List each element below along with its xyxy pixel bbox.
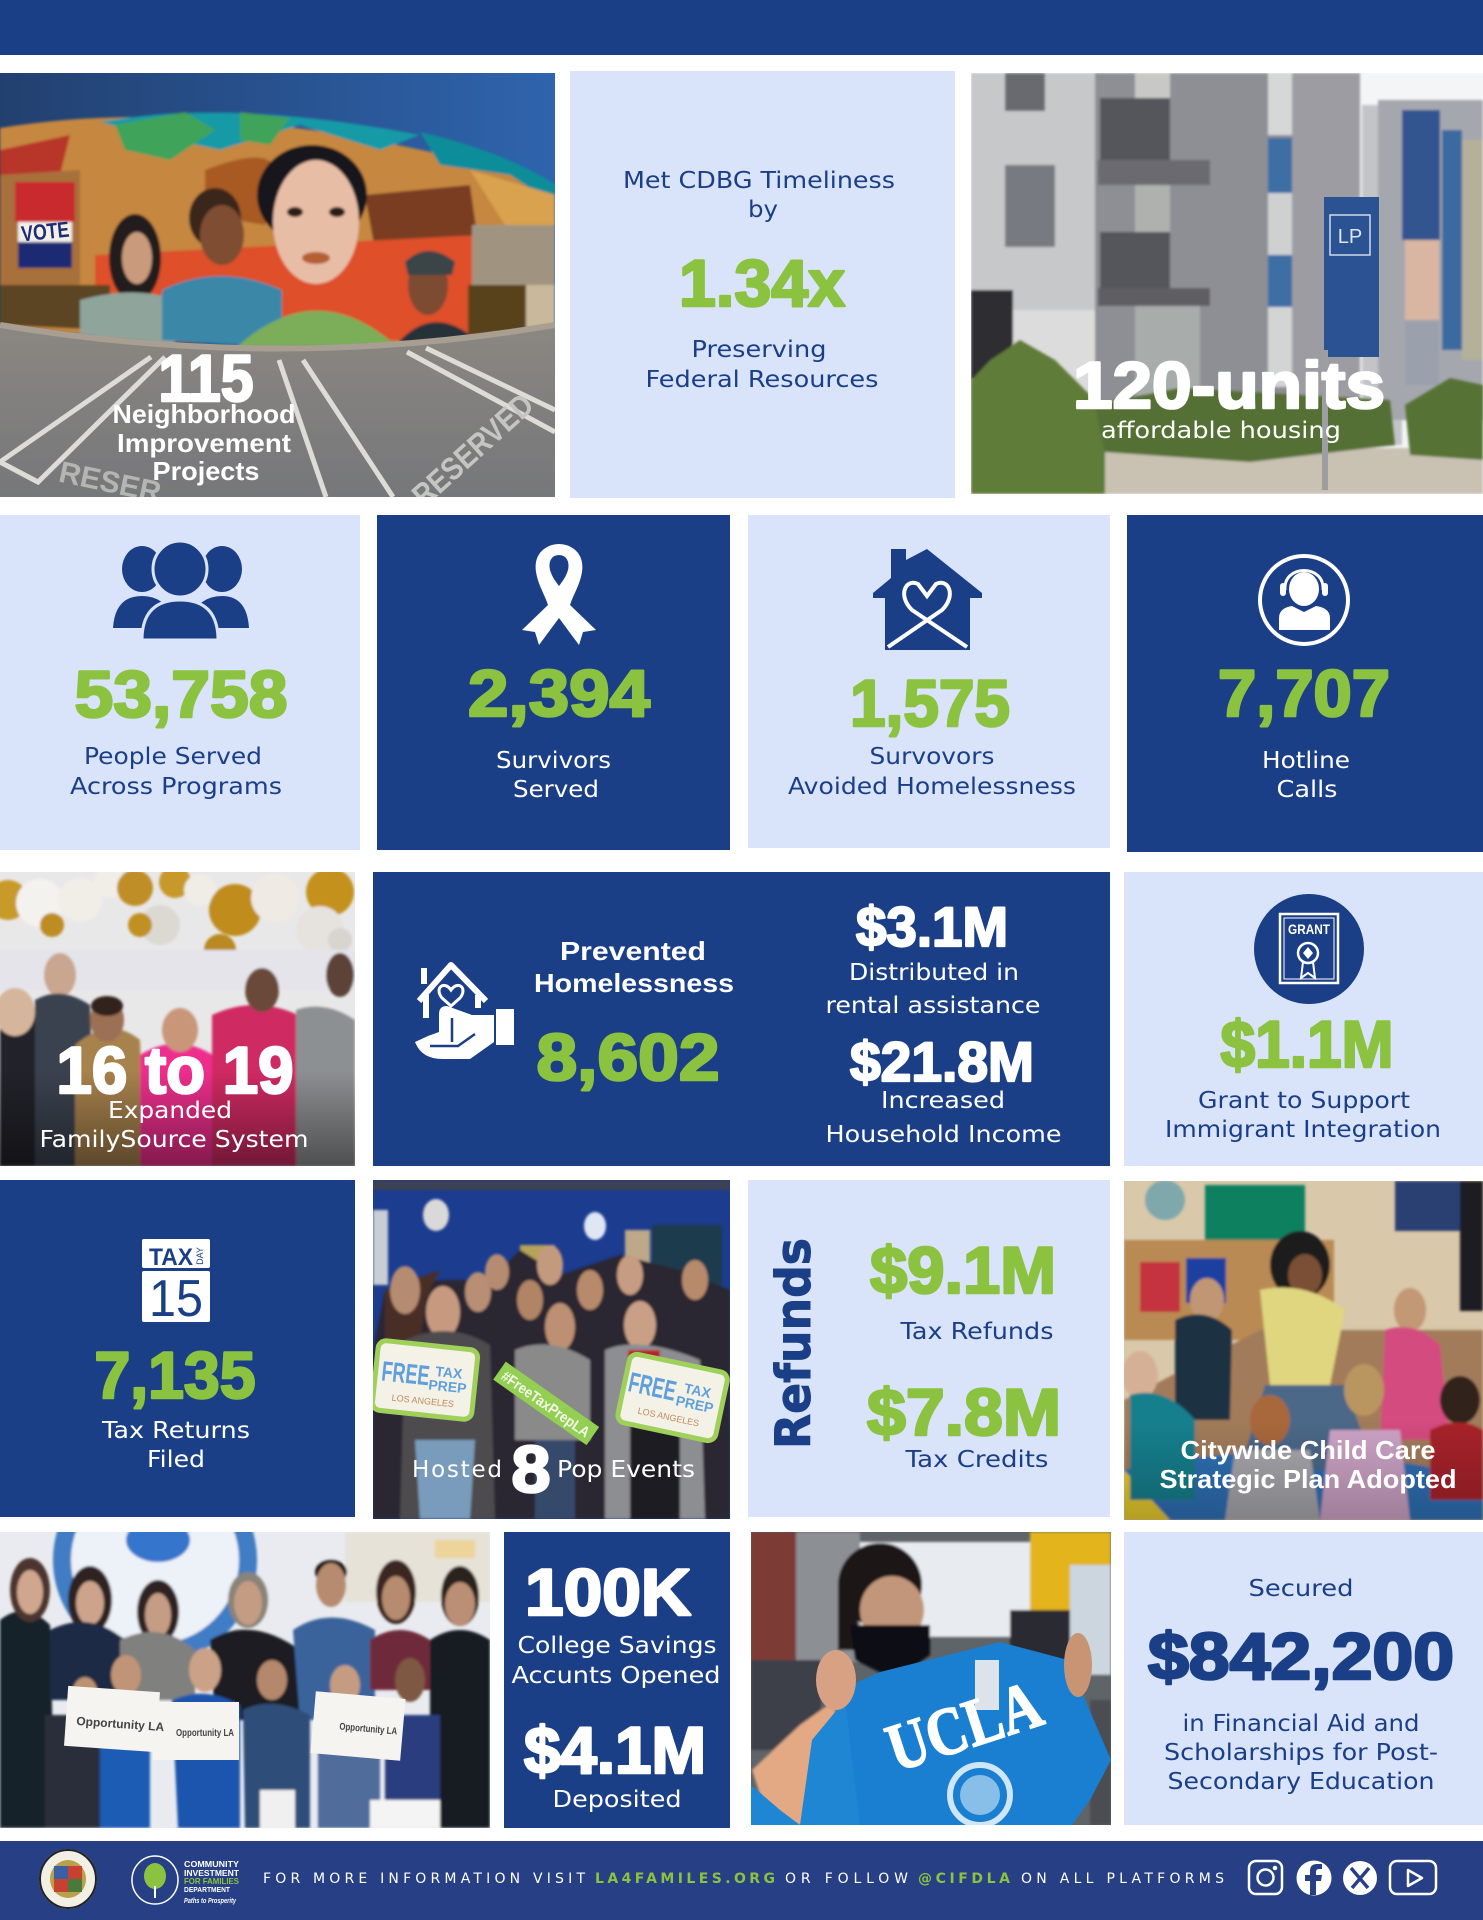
text: secured: Secured: [1248, 1576, 1354, 1602]
icon: grant certificate: GRANT: [1288, 921, 1330, 937]
caption: hosted 8 pop events: Pop Events: [557, 1457, 695, 1483]
panel: free tax prep pop events photo: LOS ANGELES: [391, 1393, 454, 1409]
panel: prevented homelessness: [373, 872, 1110, 1166]
panel: free tax prep pop events photo: PREP: [428, 1376, 467, 1396]
stat: 53,758: 53,758: [74, 657, 288, 731]
icon: X: [1343, 1861, 1377, 1895]
icon: instagram: [1249, 1861, 1282, 1894]
panel: neighborhood improvement mural photo: RESER: [56, 456, 164, 510]
text: tax returns filed: [101, 1418, 250, 1473]
caption: neighborhood improvement projects: Neighborhood: [112, 399, 296, 429]
text: CIFD name: DEPARTMENT: [184, 1887, 231, 1894]
text: footer call to action: OR FOLLOW: [785, 1871, 908, 1887]
panel: affordable housing building photo: LP: [1338, 226, 1362, 248]
header bar: [0, 0, 1483, 55]
text: survivors served: Survivors: [496, 748, 611, 774]
panel: free tax prep pop events photo: FREE: [626, 1366, 679, 1407]
stat: $9.1M tax refunds: [870, 1233, 1056, 1345]
panel: free tax prep pop events photo: LOS ANGELES: [637, 1406, 700, 1428]
stat: 1,575: 1,575: [850, 666, 1010, 740]
text: footer call to action: [263, 1871, 1224, 1887]
text: preserving federal resources: [646, 337, 878, 393]
caption: hosted 8 pop events: 8: [512, 1432, 550, 1506]
text: CIFD name: INVESTMENT: [184, 1868, 240, 1878]
text: financial aid description: Secondary Education: [1168, 1769, 1434, 1795]
text: prevented homelessness: Prevented: [560, 936, 706, 966]
text: survivors served: Served: [513, 777, 599, 803]
text: hotline calls: [1262, 748, 1350, 803]
panel: neighborhood improvement mural photo: [0, 73, 555, 513]
stat: $9.1M tax refunds: Tax Refunds: [899, 1319, 1054, 1345]
panel: tax returns filed: [0, 1180, 355, 1517]
stat: $21.8M household income: Household Income: [826, 1122, 1062, 1148]
footer bar: [0, 1841, 1483, 1920]
stat: 100K: 100K: [525, 1555, 691, 1629]
stat: 8,602: 8,602: [536, 1020, 720, 1094]
text: financial aid description: Scholarships for Post-: [1164, 1740, 1438, 1766]
text: people served across programs: People Served: [84, 744, 262, 770]
panel: free tax prep pop events photo: TAX: [683, 1380, 713, 1401]
icon: ribbon: [522, 544, 596, 645]
photo: group with Opportunity LA signs: [0, 1532, 490, 1828]
stat: $3.1M rental assistance: rental assistance: [826, 993, 1040, 1019]
stat: 120-units: 120-units: [1073, 348, 1385, 422]
text: footer call to action: ON ALL PLATFORMS: [1021, 1871, 1224, 1887]
photo: group with Opportunity LA signs: Opportunity LA: [339, 1722, 398, 1738]
panel: child care photo: [1122, 1180, 1483, 1520]
text: prevented homelessness: Homelessness: [534, 968, 734, 998]
stat: $21.8M household income: $21.8M: [850, 1030, 1034, 1093]
stat: $4.1M deposited: $4.1M: [524, 1713, 706, 1787]
caption: neighborhood improvement projects: [112, 399, 296, 486]
text: survovors avoided homelessness: Avoided Homelessness: [788, 774, 1076, 800]
text: hotline calls: Hotline: [1262, 748, 1350, 774]
stat: 16 to 19: 16 to 19: [56, 1033, 294, 1107]
stat: $3.1M rental assistance: [826, 895, 1040, 1019]
text: people served across programs: [70, 744, 282, 800]
panel: free tax prep pop events photo: TAX: [435, 1363, 464, 1382]
photo: student holding UCLA shirt: [751, 1532, 1111, 1825]
caption: citywide child care strategic plan adopted: Strategic Plan Adopted: [1160, 1464, 1456, 1494]
stat: $4.1M deposited: Deposited: [552, 1787, 682, 1813]
text: college savings accunts opened: Accunts Opened: [512, 1663, 720, 1689]
panel: survivors served: [377, 515, 730, 850]
text: survovors avoided homelessness: Survovors: [870, 744, 994, 770]
icon: youtube: [1390, 1861, 1436, 1894]
icon: tax day calendar: TAX: [149, 1244, 193, 1271]
icon: tax day calendar: DAY: [195, 1247, 205, 1265]
text: hotline calls: Calls: [1276, 777, 1338, 803]
icon: tax day calendar: 15: [149, 1270, 203, 1328]
caption: hosted 8 pop events: [412, 1432, 695, 1506]
text: footer call to action: @CIFDLA: [918, 1871, 1010, 1887]
text: CIFD name: [184, 1859, 240, 1905]
panel: free tax prep pop events photo: #FreeTaxPrepLA: [498, 1368, 593, 1441]
panel: financial aid and scholarships: [1124, 1532, 1483, 1825]
text: met CDBG timeliness by: [623, 168, 895, 223]
panel: CDBG timeliness: [570, 71, 955, 498]
panel: free tax prep pop events photo: [372, 1180, 730, 1519]
text: tax returns filed: Filed: [147, 1447, 205, 1473]
panel: neighborhood improvement mural photo: RESERVED: [405, 386, 540, 513]
caption: neighborhood improvement projects: Improvement: [117, 428, 291, 458]
text: footer call to action: FOR MORE INFORMATION VISIT: [263, 1871, 585, 1887]
photo: group with Opportunity LA signs: Opportunity LA: [176, 1728, 234, 1739]
text: people served across programs: Across Programs: [70, 774, 282, 800]
panel: survivors avoided homelessness: [748, 515, 1110, 848]
text: CIFD name: Paths to Prosperity: [184, 1898, 237, 1905]
panel: college savings accounts: [504, 1532, 730, 1828]
stat: $7.8M tax credits: Tax Credits: [904, 1447, 1048, 1473]
text: met CDBG timeliness by: Met CDBG Timeliness: [623, 168, 895, 194]
stat: 115 projects: 115: [158, 341, 254, 415]
caption: expanded FamilySource system: [40, 1098, 308, 1153]
caption: neighborhood improvement projects: Projects: [152, 456, 260, 486]
stat: 2,394: 2,394: [468, 656, 650, 730]
panel: people served: [0, 515, 360, 850]
stat: $1.1M: $1.1M: [1220, 1007, 1394, 1081]
text: met CDBG timeliness by: by: [748, 197, 778, 223]
icon: people group: [113, 541, 249, 640]
icon: CIFD logo: [132, 1856, 178, 1904]
text: prevented homelessness: [534, 936, 734, 998]
text: college savings accunts opened: College Savings: [518, 1633, 716, 1659]
icon: house with heart ribbon: [873, 549, 982, 650]
stat: 7,707: 7,707: [1218, 656, 1390, 730]
caption: expanded FamilySource system: FamilySource System: [40, 1127, 308, 1153]
stat: $21.8M household income: [826, 1030, 1062, 1148]
photo: student holding UCLA shirt: UCLA: [877, 1665, 1051, 1786]
text: CIFD name: FOR FAMILIES: [184, 1876, 239, 1886]
stat: $842,200: $842,200: [1148, 1619, 1454, 1693]
panel: affordable housing building photo: [971, 73, 1483, 494]
stat: $3.1M rental assistance: Distributed in: [849, 960, 1019, 986]
text: tax returns filed: Tax Returns: [101, 1418, 250, 1444]
text: preserving federal resources: Federal Resources: [646, 367, 878, 393]
stat: $7.8M tax credits: $7.8M: [867, 1375, 1061, 1449]
text: survivors served: [496, 748, 611, 803]
stat: $21.8M household income: Increased: [881, 1088, 1005, 1114]
caption: citywide child care strategic plan adopted: [1160, 1435, 1456, 1494]
stat: $9.1M tax refunds: $9.1M: [870, 1233, 1056, 1307]
text: grant to support immigrant integration: [1165, 1088, 1441, 1143]
heading: refunds vertical: Refunds: [766, 1238, 822, 1449]
icon: grant certificate: [1254, 894, 1364, 1004]
caption: affordable housing: affordable housing: [1101, 418, 1341, 444]
text: survovors avoided homelessness: [788, 744, 1076, 800]
text: grant to support immigrant integration: Immigrant Integration: [1165, 1117, 1441, 1143]
panel: neighborhood improvement mural photo: VOTE: [20, 217, 70, 246]
text: CIFD name: COMMUNITY: [184, 1859, 239, 1869]
icon: tax day calendar: [142, 1239, 210, 1328]
icon: city seal: [39, 1849, 97, 1909]
panel: immigrant integration grant: [1124, 872, 1483, 1166]
caption: citywide child care strategic plan adopted: Citywide Child Care: [1180, 1435, 1436, 1465]
panel: free tax prep pop events photo: PREP: [674, 1392, 715, 1416]
panel: hotline calls: [1127, 515, 1483, 852]
panel: FamilySource system photo: [0, 866, 355, 1166]
photo: group with Opportunity LA signs: Opportunity LA: [76, 1714, 165, 1734]
text: preserving federal resources: Preserving: [692, 337, 826, 363]
stat: 1.34x: 1.34x: [679, 246, 845, 320]
caption: hosted 8 pop events: Hosted: [412, 1457, 502, 1483]
panel: free tax prep pop events photo: FREE: [380, 1356, 431, 1391]
icon: headset agent: [1260, 556, 1348, 644]
stat: $3.1M rental assistance: $3.1M: [856, 895, 1008, 958]
text: footer call to action: LA4FAMILES.ORG: [595, 1871, 775, 1887]
panel: refunds: [748, 1180, 1110, 1517]
icon: hand holding house: [415, 965, 514, 1059]
caption: expanded FamilySource system: Expanded: [108, 1098, 232, 1124]
text: financial aid description: [1164, 1711, 1438, 1795]
icon: facebook: [1296, 1860, 1332, 1896]
text: financial aid description: in Financial Aid and: [1182, 1711, 1420, 1737]
text: college savings accunts opened: [512, 1633, 720, 1689]
stat: 7,135: 7,135: [94, 1338, 256, 1412]
text: grant to support immigrant integration: Grant to Support: [1198, 1088, 1410, 1114]
